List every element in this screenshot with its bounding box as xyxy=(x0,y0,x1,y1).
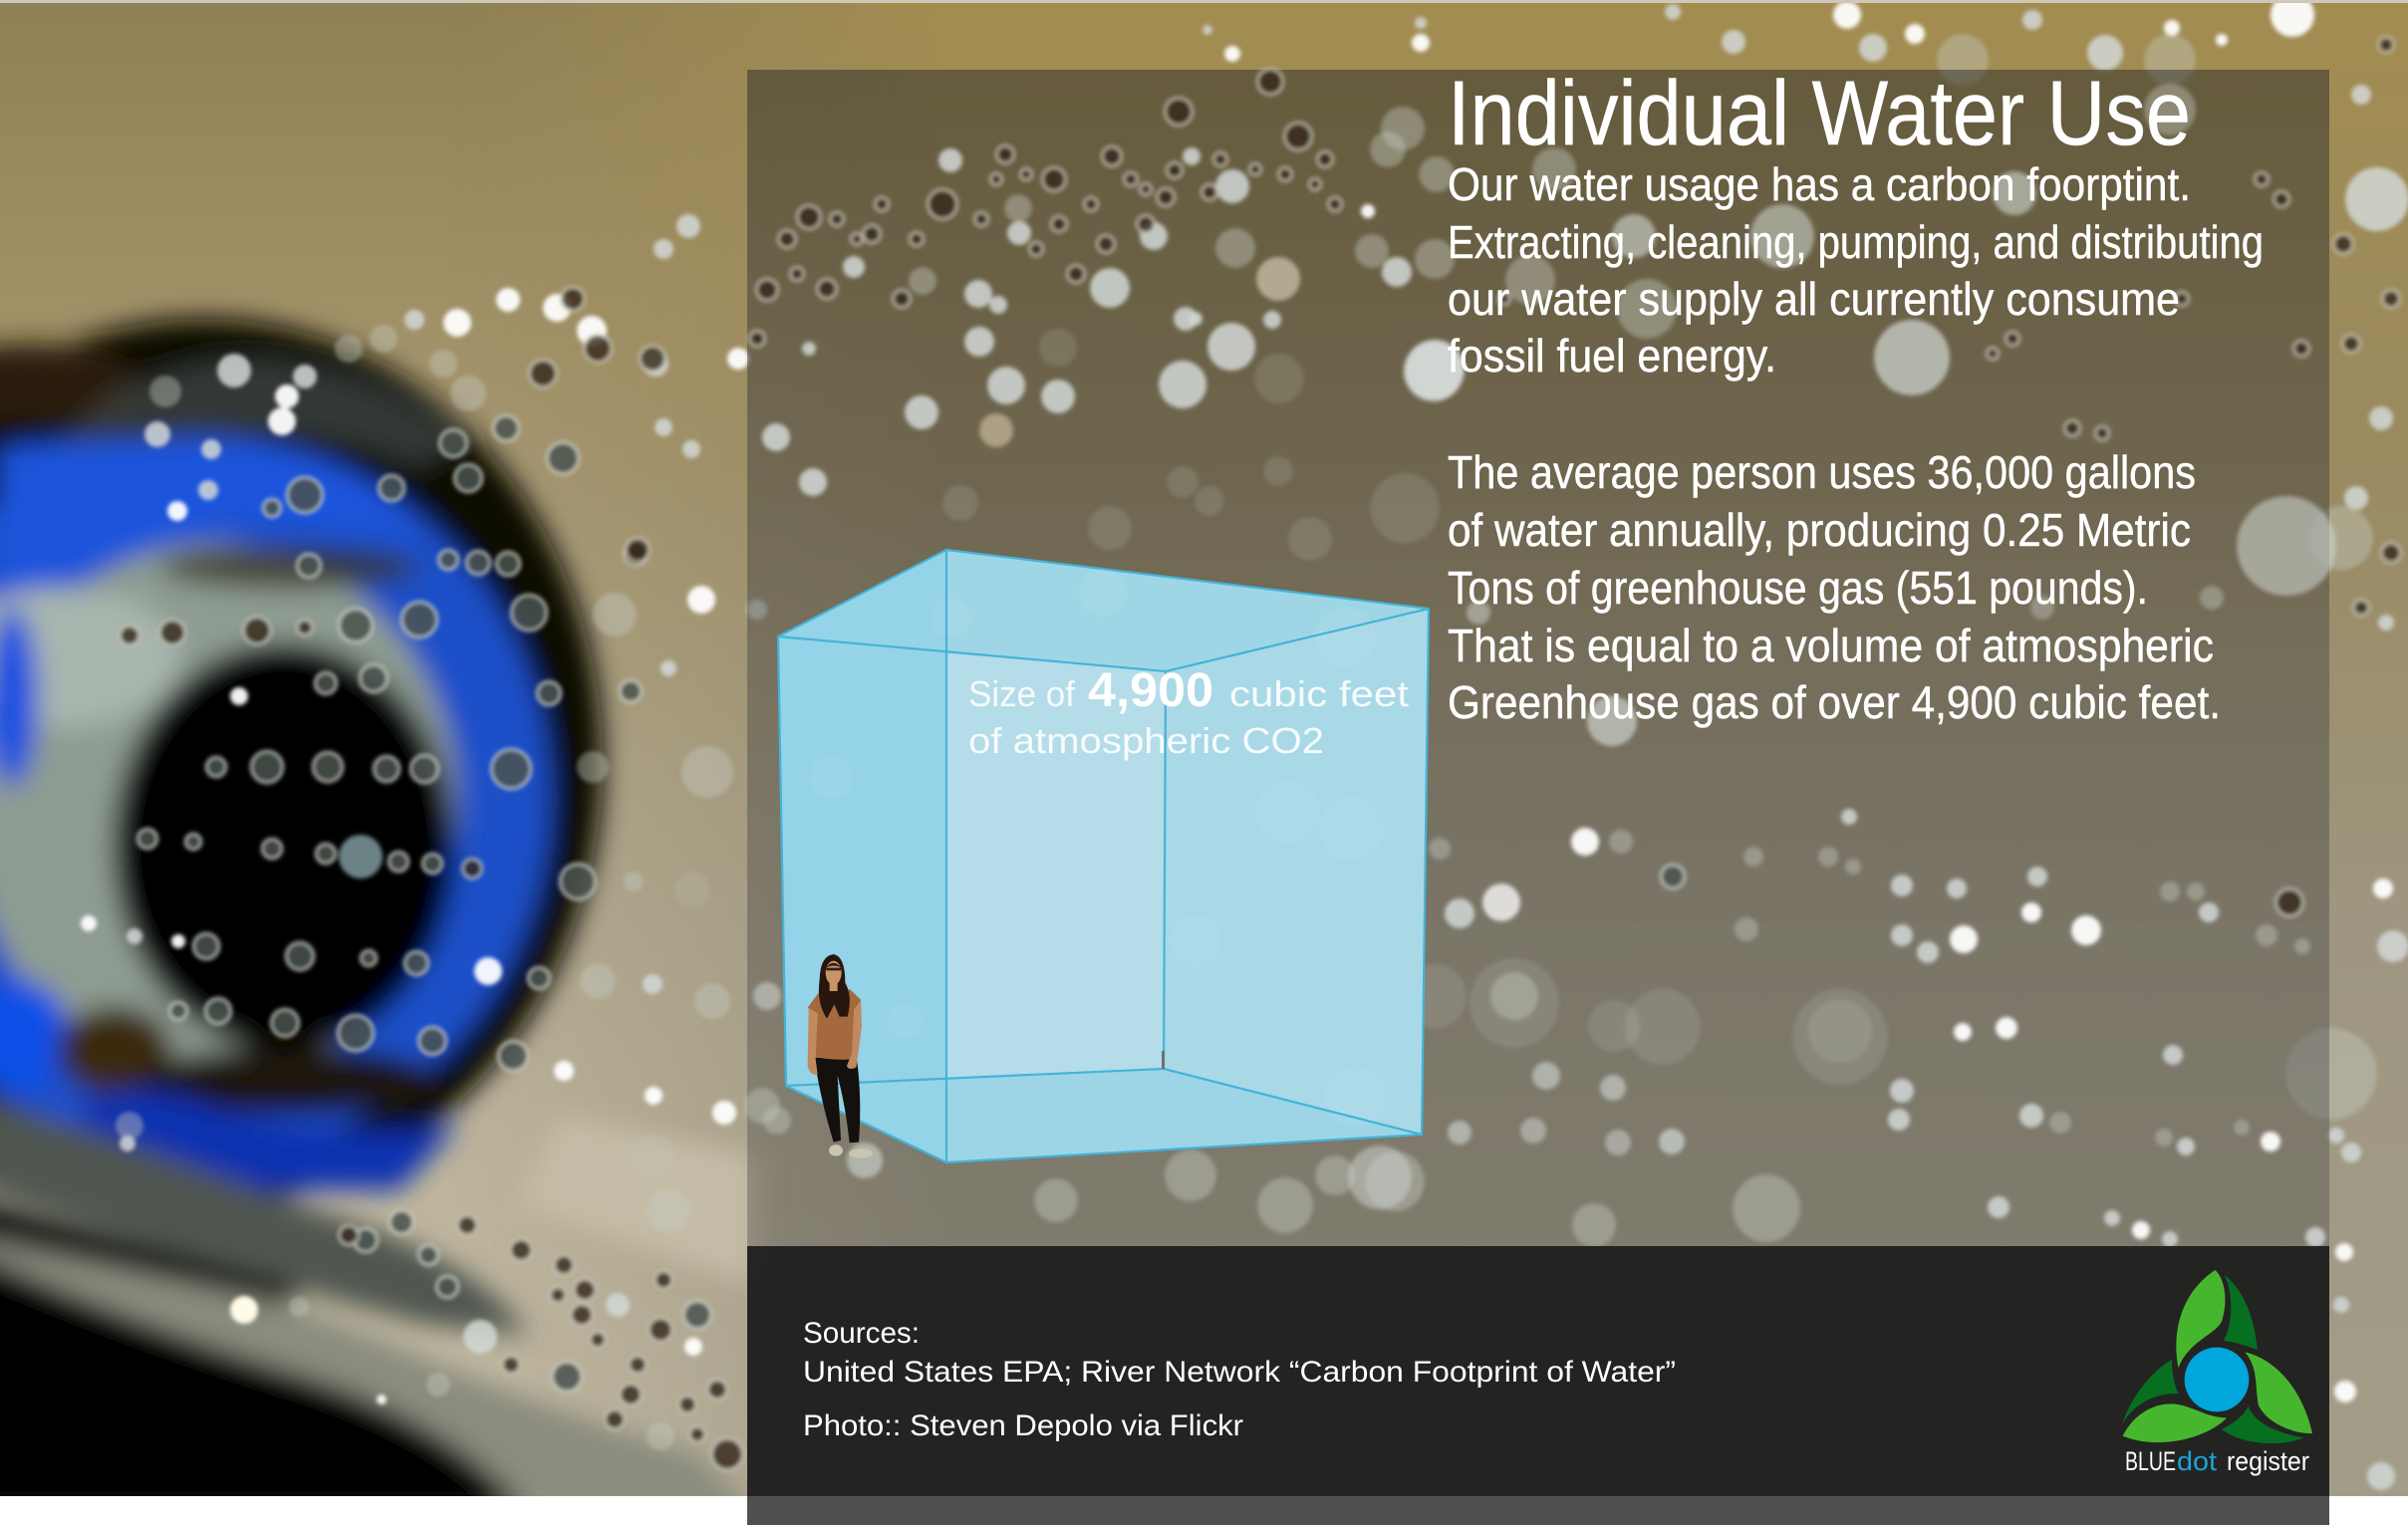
statistics text block: Greenhouse gas of over 4,900 cubic feet. xyxy=(1448,676,2221,728)
footer panel xyxy=(747,1246,2329,1525)
sources text xyxy=(803,1317,1676,1442)
left photo droplets xyxy=(496,288,520,312)
statistics text block: Tons of greenhouse gas (551 pounds). xyxy=(1448,562,2148,614)
panel droplets xyxy=(744,69,2336,1247)
cube label: 4,900 xyxy=(1088,664,1213,717)
intro text block: Extracting, cleaning, pumping, and distributing xyxy=(1448,216,2264,268)
sources text: Photo:: Steven Depolo via Flickr xyxy=(803,1409,1243,1442)
logo: BLUEdot register: dot xyxy=(2177,1446,2218,1476)
cube label: of atmospheric CO2 xyxy=(968,720,1324,761)
cube label: Size of xyxy=(968,673,1076,714)
intro text block: Our water usage has a carbon foorptint. xyxy=(1448,158,2191,210)
cube label xyxy=(968,664,1409,761)
person for scale xyxy=(808,954,873,1158)
sources text: United States EPA; River Network “Carbon Footprint of Water” xyxy=(803,1356,1676,1389)
statistics text block: That is equal to a volume of atmospheric xyxy=(1448,620,2214,671)
illustration: cube representing 4,900 cubic feet of CO2 xyxy=(778,550,1429,1162)
title: Individual Water Use xyxy=(1448,63,2191,164)
intro text block xyxy=(1448,158,2264,382)
logo: BLUEdot register: BLUE xyxy=(2125,1446,2176,1476)
panel: translucent main panel xyxy=(744,69,2336,1247)
logo: BLUEdot register xyxy=(2122,1270,2312,1476)
statistics text block xyxy=(1448,446,2221,728)
statistics text block: The average person uses 36,000 gallons xyxy=(1448,446,2196,498)
logo: BLUEdot register: register xyxy=(2227,1446,2309,1476)
statistics text block: of water annually, producing 0.25 Metric xyxy=(1448,504,2191,556)
intro text block: our water supply all currently consume xyxy=(1448,273,2180,325)
cube label: cubic feet xyxy=(1229,673,1409,714)
intro text block: fossil fuel energy. xyxy=(1448,330,1776,382)
top strip and right strip droplets xyxy=(1224,46,1240,62)
sources text: Sources: xyxy=(803,1317,920,1350)
